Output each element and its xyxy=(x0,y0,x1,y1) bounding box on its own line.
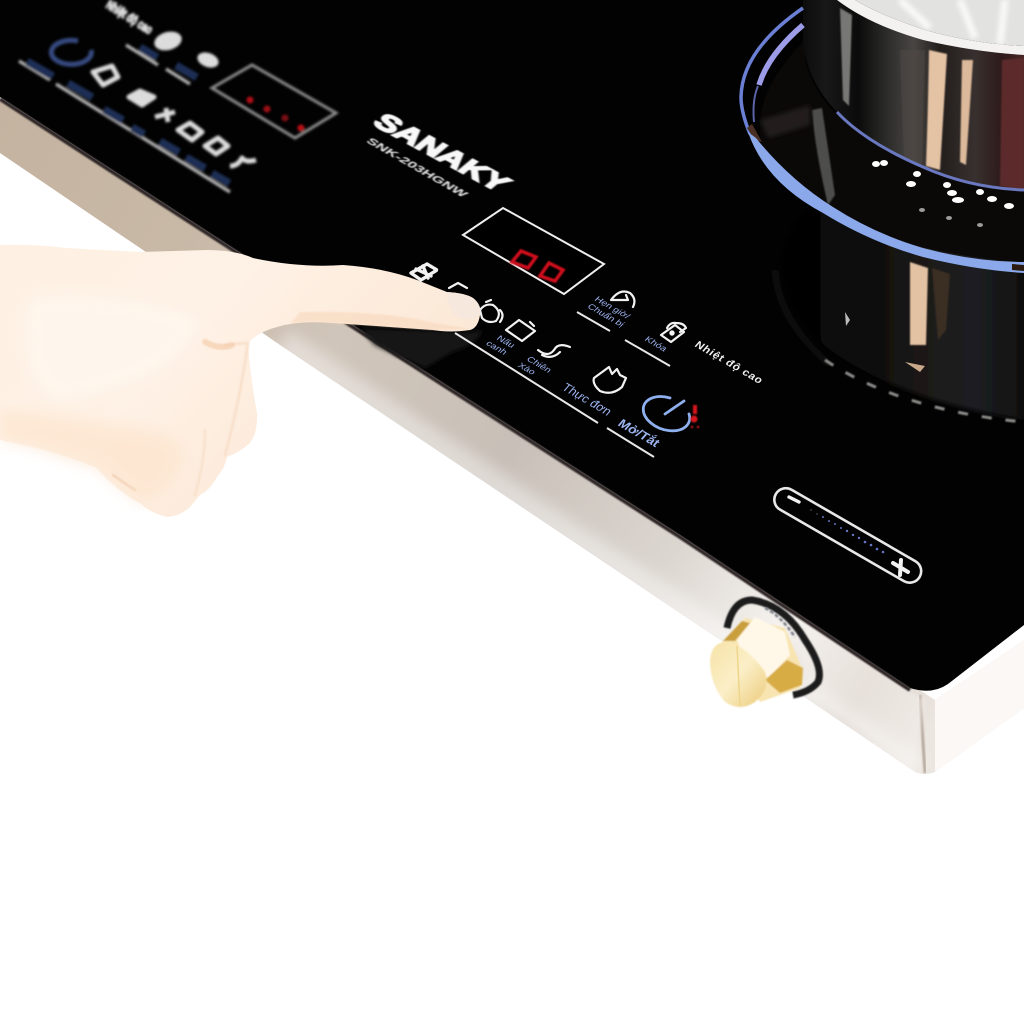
fingernail xyxy=(447,292,480,319)
icon: pot xyxy=(449,283,467,288)
label: stir fry: Xào xyxy=(516,361,538,376)
icon: square pot xyxy=(506,320,535,341)
pot rim xyxy=(837,0,1024,55)
label: on off: Mở/Tắt xyxy=(615,416,664,450)
power icon xyxy=(643,397,690,431)
hand pointing xyxy=(0,245,480,517)
label: timer: Chuẩn bị xyxy=(586,302,626,328)
pot streaks xyxy=(840,8,1024,190)
icon: timer xyxy=(611,292,634,307)
icon: steamer grid xyxy=(411,264,437,280)
red power indicator xyxy=(690,405,699,428)
pot body xyxy=(803,0,1024,190)
pot bottom light dots xyxy=(872,160,1014,227)
label: timer xyxy=(586,295,634,328)
icon: menu hand xyxy=(594,367,626,393)
far control panel (out of focus) xyxy=(19,0,336,192)
finger reflection on glass xyxy=(360,328,482,368)
icon: kettle xyxy=(480,300,502,322)
far power icon xyxy=(51,40,91,64)
label: stir fry: Chiên xyxy=(525,355,554,374)
model number: SNK-203HGNW xyxy=(363,136,471,199)
pot base reflection on glass xyxy=(775,105,1024,422)
divider lines xyxy=(455,312,670,457)
label: high temperature: Nhiệt độ cao xyxy=(692,339,765,386)
minus button xyxy=(789,497,799,502)
far display xyxy=(212,65,336,138)
knob barrel xyxy=(722,617,803,702)
label: soup: canh xyxy=(484,339,509,356)
icon: lock xyxy=(661,323,686,342)
black glass top xyxy=(0,0,1024,691)
icon: frying waves xyxy=(538,345,570,357)
brand: SANAKY logo: SANAKY xyxy=(367,109,516,197)
label: lock: Khóa xyxy=(643,335,670,353)
stainless steel body xyxy=(0,100,1024,774)
brass knob xyxy=(710,600,819,707)
label: soup xyxy=(484,332,517,357)
digits 00 xyxy=(512,251,563,281)
plus button xyxy=(893,560,908,575)
far icons xyxy=(93,66,256,166)
induction cooking ring and pot xyxy=(741,0,1024,422)
labels xyxy=(484,295,670,450)
far lines xyxy=(19,45,230,192)
level dots xyxy=(810,509,884,553)
far lock and timer icons xyxy=(152,29,184,53)
knob face xyxy=(710,642,766,707)
control icons xyxy=(411,264,686,393)
knuckle shading xyxy=(113,342,248,495)
label: soup: Nấu xyxy=(495,334,517,349)
far labels xyxy=(25,44,231,187)
dark inner area between ring and pot xyxy=(760,40,1024,262)
power slider xyxy=(770,484,925,587)
blue light ring xyxy=(741,8,1024,273)
label: stir fry xyxy=(516,354,554,382)
label: timer: Hẹn giờ/ xyxy=(593,295,632,321)
temperature display xyxy=(463,208,604,294)
label: menu: Thực đơn xyxy=(559,380,615,418)
knob black ring xyxy=(727,600,819,695)
